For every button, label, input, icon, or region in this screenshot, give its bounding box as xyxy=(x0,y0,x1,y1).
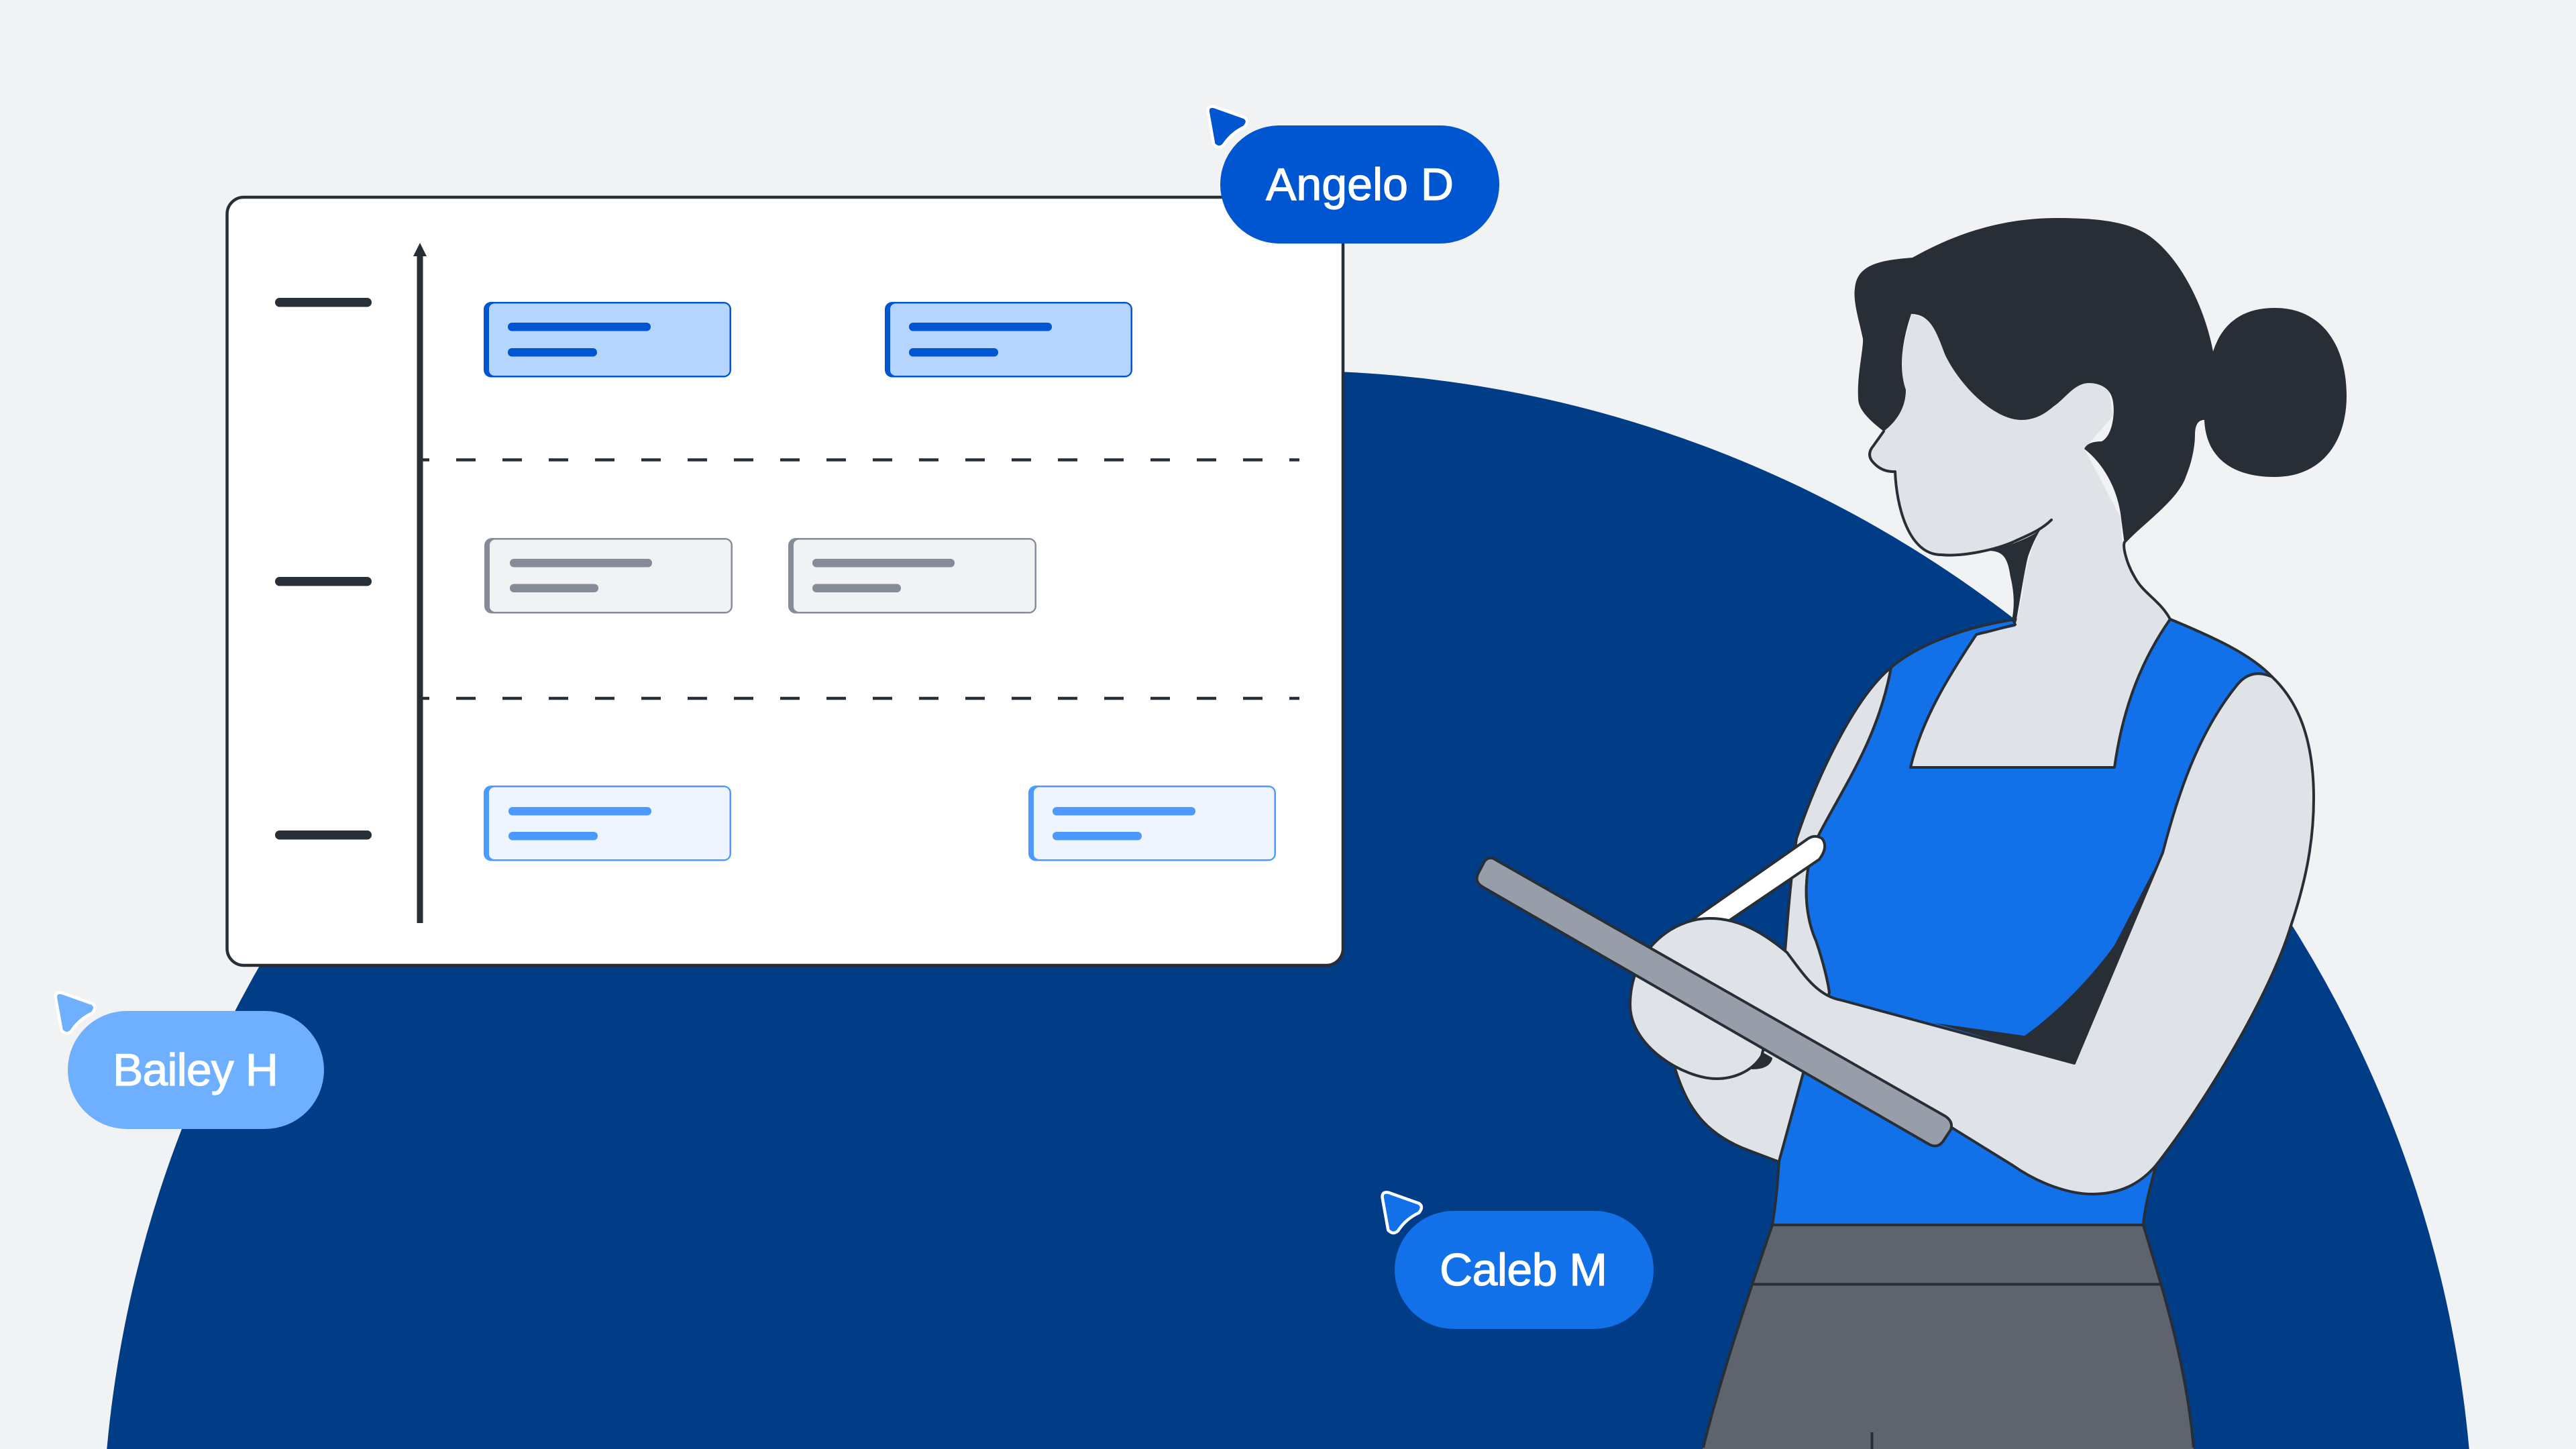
skirt belt line xyxy=(1754,1283,2159,1285)
stylus xyxy=(1691,837,1825,920)
callout: Angelo D: Angelo D xyxy=(1266,159,1454,210)
neck shadow xyxy=(1990,529,2041,627)
skirt seam xyxy=(1870,1432,1873,1449)
blue top xyxy=(1772,619,2272,1225)
hair and bun xyxy=(1854,218,2347,544)
callout: Bailey H xyxy=(68,1011,324,1129)
icon: Bailey cursor xyxy=(56,993,95,1033)
face profile line xyxy=(1870,431,2051,555)
grey skirt xyxy=(1703,1225,2194,1449)
neckline xyxy=(1911,542,2170,767)
row label bars xyxy=(275,298,372,840)
far arm xyxy=(1675,667,1891,1162)
hand shadow xyxy=(1677,1005,1771,1068)
face, neck and chest xyxy=(1870,314,2170,767)
task card: grey row 2 right xyxy=(788,538,1036,613)
person illustration xyxy=(1477,218,2347,1449)
icon: Caleb cursor xyxy=(1383,1192,1421,1233)
icon: Angelo cursor xyxy=(1208,107,1247,147)
tablet xyxy=(1477,858,1951,1146)
callout: Angelo D xyxy=(1220,125,1499,244)
background navy circle xyxy=(107,370,2469,1449)
panel: timeline board xyxy=(227,197,1343,965)
task card: blue row 1 left xyxy=(484,302,731,377)
task card: blue row 1 right xyxy=(885,302,1132,377)
skirt outline xyxy=(1703,1225,2194,1448)
arrow: vertical axis xyxy=(413,243,427,923)
callout: Caleb M: Caleb M xyxy=(1440,1244,1607,1295)
row dividers xyxy=(423,460,1299,698)
arm shadow xyxy=(1935,853,2163,1063)
near arm and hand xyxy=(1630,674,2314,1194)
task card: light blue row 3 left xyxy=(484,786,731,861)
task card: grey row 2 left xyxy=(484,538,733,613)
callout: Bailey H: Bailey H xyxy=(113,1044,278,1095)
task card: light blue row 3 right xyxy=(1028,786,1276,861)
callout: Caleb M xyxy=(1395,1211,1654,1329)
